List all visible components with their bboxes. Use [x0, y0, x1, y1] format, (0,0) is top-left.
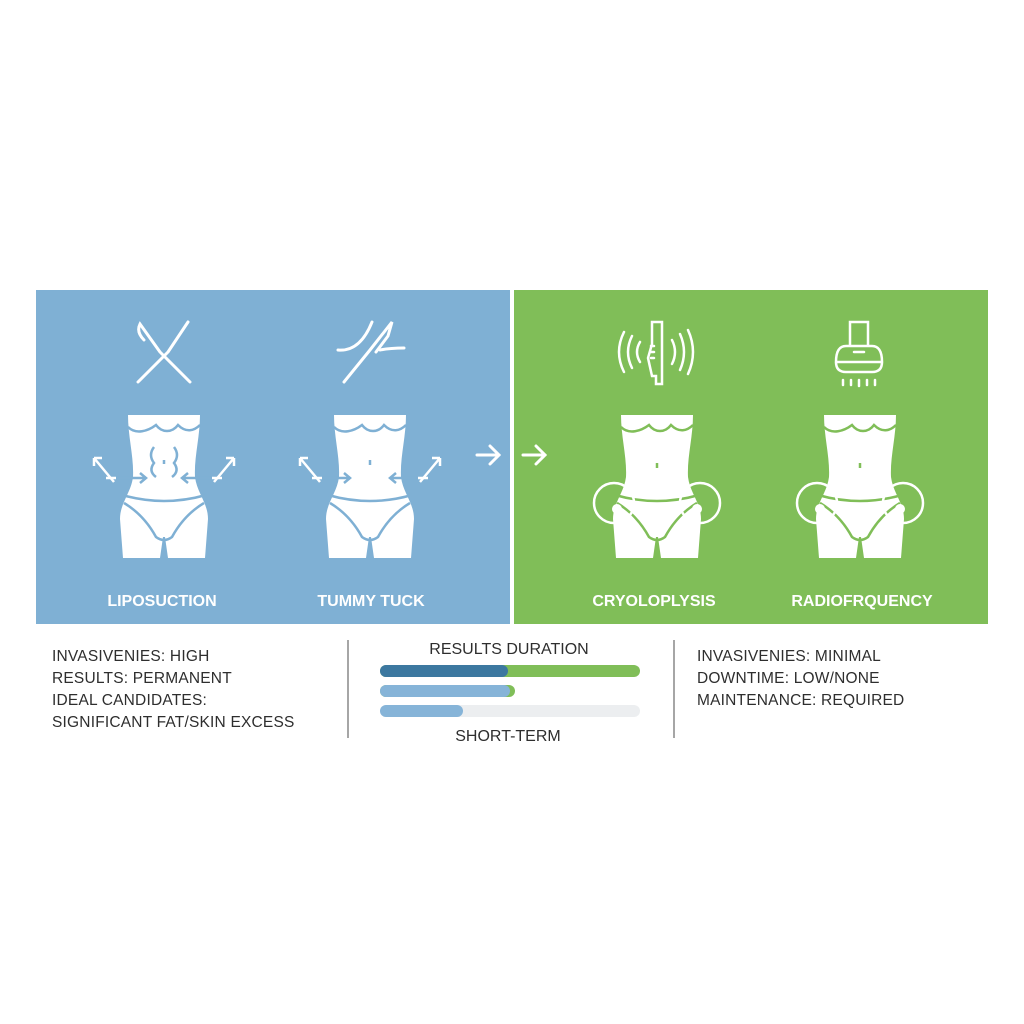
text block: surgical facts: RESULTS: PERMANENT: [52, 670, 232, 687]
arrows lipo: [94, 458, 234, 483]
label: radiofrequency: RADIOFRQUENCY: [791, 593, 933, 610]
icon: scalpel with incision: [338, 322, 404, 382]
arrows between panels: [477, 446, 545, 464]
text block: surgical facts: INVASIVENIES: HIGH: [52, 648, 210, 665]
text block: non-surgical facts: INVASIVENIES: MINIMAL: [697, 648, 881, 665]
panel: non-surgical (green): [514, 290, 988, 624]
text block: non-surgical facts: [697, 648, 904, 709]
text block: non-surgical facts: DOWNTIME: LOW/NONE: [697, 670, 880, 687]
label: tummy tuck: TUMMY TUCK: [317, 593, 425, 610]
figure: cryolipolysis torso: [594, 415, 720, 558]
figure: liposuction torso: [120, 415, 208, 558]
main diagram: RESULTS DURATION: [429, 641, 589, 658]
text block: non-surgical facts: MAINTENANCE: REQUIRED: [697, 692, 904, 709]
label: cryolipolysis: CRYOLOPLYSIS: [592, 593, 716, 610]
icon: crossed scalpels: [138, 322, 190, 382]
dividers: [347, 640, 349, 738]
chart: results duration bars: [386, 671, 634, 711]
text block: surgical facts: SIGNIFICANT FAT/SKIN EXCESS: [52, 714, 295, 731]
text block: surgical facts: IDEAL CANDIDATES:: [52, 692, 207, 709]
panel: surgical (blue): [36, 290, 510, 624]
label: liposuction: LIPOSUCTION: [107, 593, 217, 610]
icon: radiofrequency device: [836, 322, 882, 386]
figure: tummy tuck torso: [326, 415, 414, 558]
text block: surgical facts: [52, 648, 295, 731]
figure: radiofrequency torso: [797, 415, 923, 558]
main diagram: SHORT-TERM: [455, 728, 561, 745]
icon: cryolipolysis device: [619, 322, 693, 384]
